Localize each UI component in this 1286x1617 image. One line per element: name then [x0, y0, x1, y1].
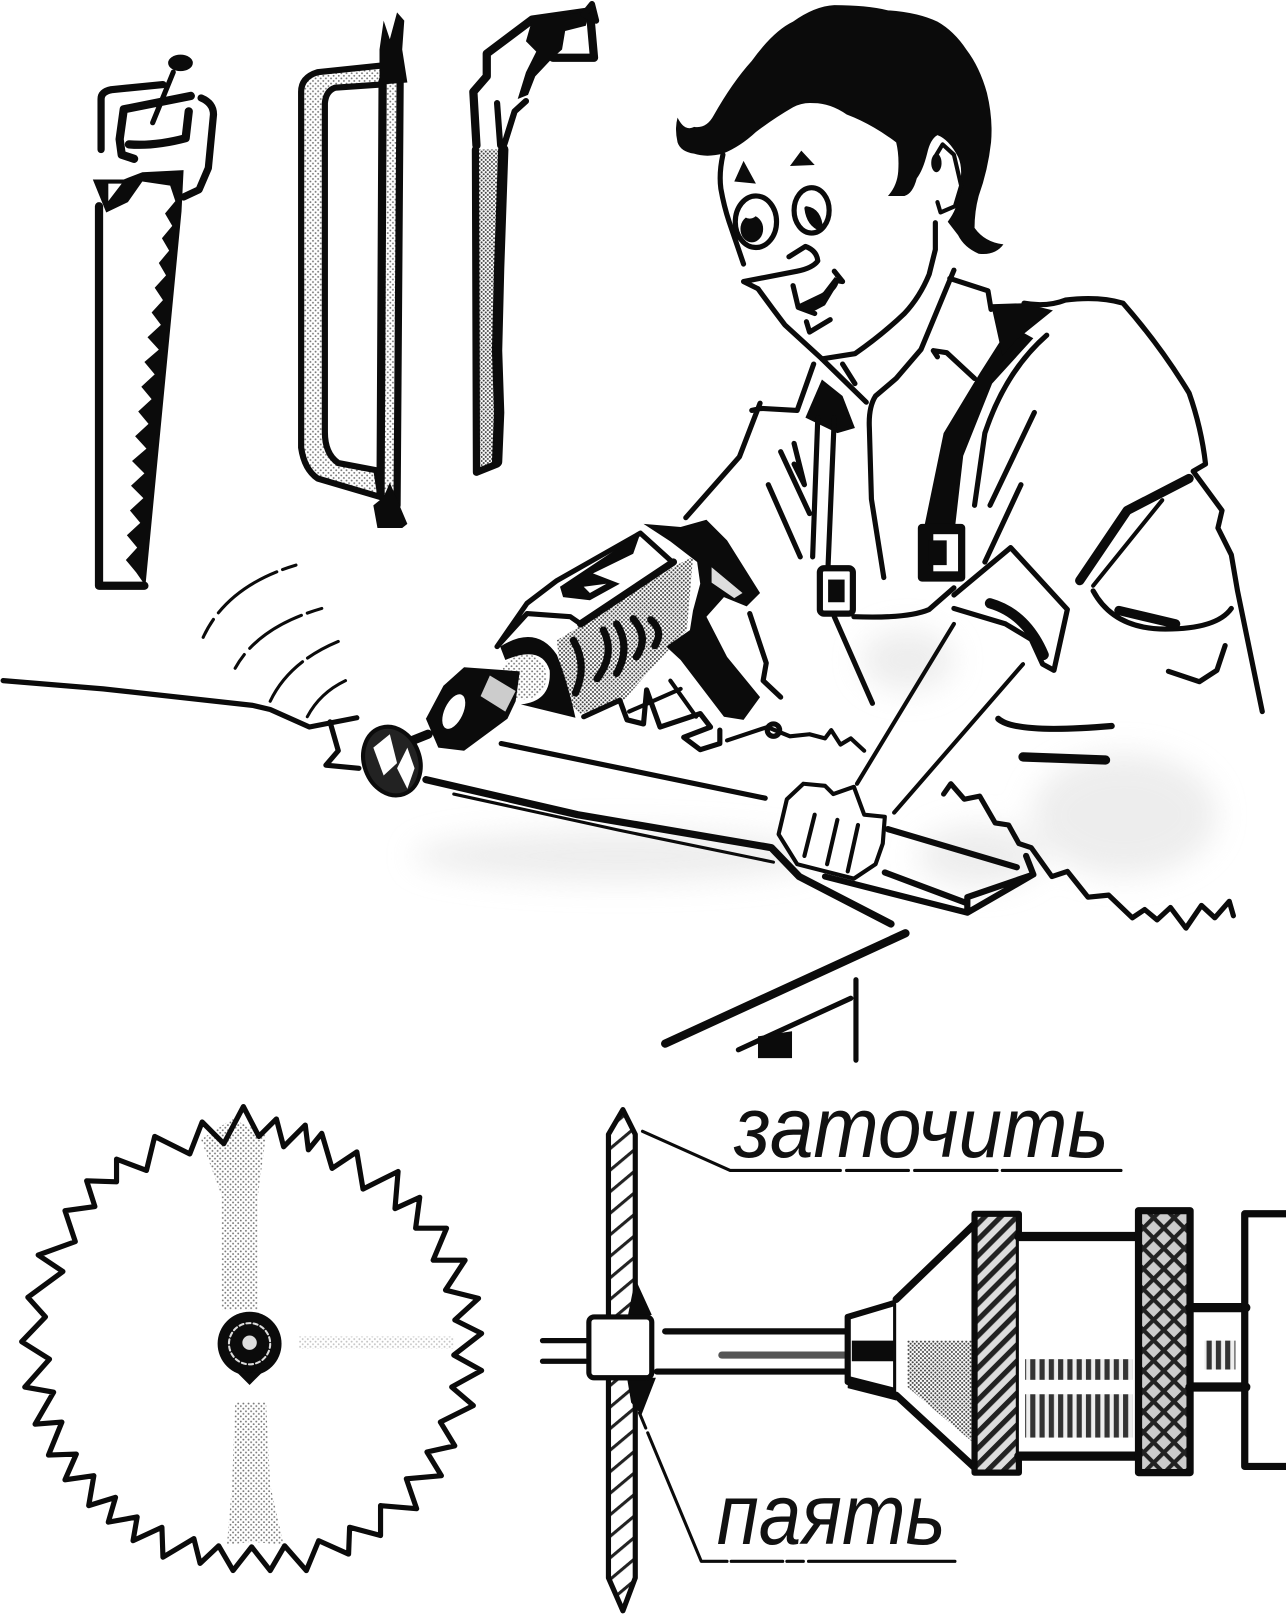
table underside and leg — [665, 933, 905, 1044]
shaft end — [542, 1341, 586, 1361]
arbor — [407, 734, 428, 742]
forearm — [857, 624, 1023, 813]
disc hub — [218, 1312, 282, 1385]
icon: keyhole saw hanging on wall — [473, 4, 596, 474]
shoulder and arm outline — [1024, 299, 1262, 712]
squiggle of sawdust — [727, 724, 864, 751]
sawdust wavy edge — [944, 784, 1233, 928]
keyhole saw blade — [475, 150, 504, 474]
drill with saw disc — [354, 520, 864, 804]
nut on shaft — [589, 1317, 652, 1378]
eyebrows — [734, 151, 815, 184]
saw blade — [93, 170, 184, 586]
paper stipple shading — [413, 629, 1217, 887]
label: sharpen: заточить — [733, 1080, 1109, 1176]
vents — [573, 619, 659, 693]
blade in section — [608, 1110, 635, 1611]
small cone — [848, 1302, 896, 1395]
keyhole saw handle — [473, 4, 596, 145]
neck — [1190, 1308, 1246, 1387]
chuck ring front — [975, 1214, 1019, 1473]
drill body stipple — [557, 557, 693, 714]
hacksaw blade — [381, 77, 400, 505]
buckles — [820, 524, 965, 614]
shaft — [657, 1331, 848, 1372]
ear — [936, 144, 961, 212]
apron — [834, 588, 1231, 703]
hair — [676, 5, 1003, 254]
worker figure — [676, 5, 1262, 813]
left eye — [735, 196, 777, 248]
icon: hand saw hanging on wall — [93, 55, 213, 586]
collar and shirt — [686, 270, 991, 578]
leader: solder — [639, 1413, 955, 1563]
chuck — [426, 667, 520, 751]
disc outline with teeth — [22, 1107, 482, 1571]
large cone — [896, 1224, 975, 1467]
saw handle — [101, 55, 213, 197]
chuck ring rear — [1139, 1211, 1190, 1473]
saw disc seen edge-on — [354, 719, 430, 804]
rolled sleeve — [954, 548, 1067, 670]
chuck body — [1019, 1234, 1139, 1460]
hacksaw frame — [301, 65, 387, 497]
solder joints — [627, 1279, 656, 1415]
chuck and disc assembly drawing — [542, 1080, 1286, 1611]
hacksaw clamps — [373, 12, 407, 528]
suspender strap — [924, 328, 1033, 528]
label: solder: паять — [717, 1467, 946, 1563]
disc stipple shading — [201, 1119, 454, 1545]
icon: hacksaw hanging on wall — [301, 12, 407, 528]
right eye — [794, 188, 829, 233]
drill top housing — [497, 533, 673, 647]
saw disc front view — [22, 1107, 482, 1571]
board being cut — [501, 744, 765, 798]
table top edge — [3, 681, 357, 727]
face — [720, 144, 961, 359]
drill nose ring — [500, 637, 575, 718]
hand on handle — [584, 520, 781, 750]
table edge and board — [3, 681, 1033, 1060]
nose and mouth — [744, 246, 843, 332]
sound arcs — [203, 565, 345, 717]
leader: sharpen — [642, 1080, 1121, 1176]
drill housing — [1245, 1214, 1286, 1466]
hand holding board — [779, 784, 885, 879]
